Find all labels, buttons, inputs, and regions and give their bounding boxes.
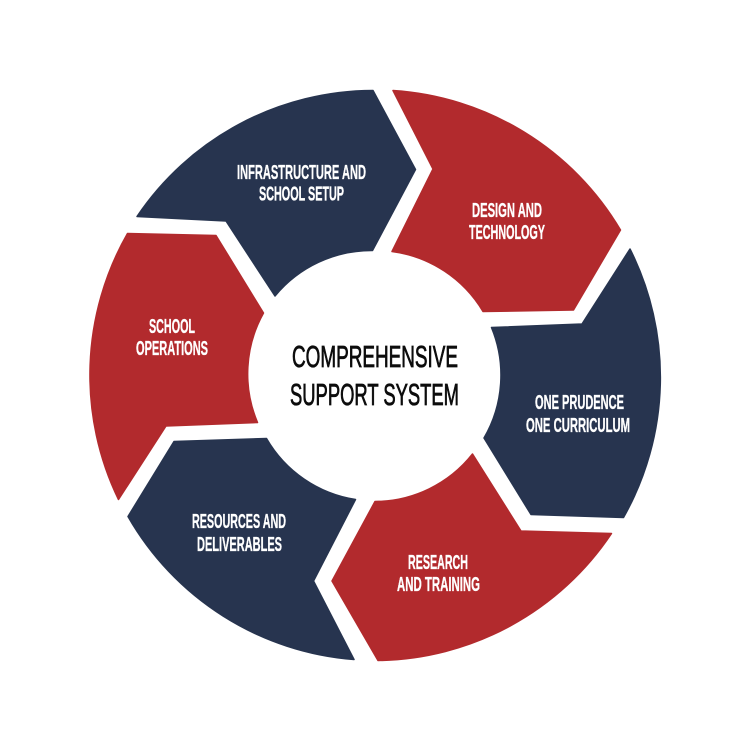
label: one prudence one curriculum: ONE CURRICULUM [526, 415, 630, 437]
label: research and training [397, 552, 480, 596]
label: research and training: AND TRAINING [397, 574, 480, 596]
panel: research and training [332, 454, 612, 660]
panel: resources and deliverables [128, 438, 356, 660]
center title: COMPREHENSIVE [292, 340, 458, 374]
label: design and technology: TECHNOLOGY [469, 222, 545, 244]
panel: design and technology [392, 90, 620, 312]
label: design and technology [469, 200, 545, 244]
label: infrastructure and school setup: INFRASTRUCTURE AND [237, 162, 366, 184]
panel: one prudence one curriculum [484, 249, 660, 518]
label: school operations [136, 316, 208, 360]
label: school operations: OPERATIONS [136, 338, 208, 360]
label: design and technology: DESIGN AND [472, 200, 542, 222]
label: research and training: RESEARCH [408, 552, 468, 574]
label: resources and deliverables: DELIVERABLES [197, 534, 282, 556]
label: infrastructure and school setup [237, 162, 366, 206]
panel: infrastructure and school setup [137, 90, 416, 296]
label: one prudence one curriculum: ONE PRUDENCE [535, 392, 624, 414]
center title [290, 340, 459, 412]
label: one prudence one curriculum [526, 392, 630, 437]
label: resources and deliverables: RESOURCES AND [192, 511, 286, 533]
label: resources and deliverables [192, 511, 286, 556]
panel: school operations [90, 234, 264, 500]
label: infrastructure and school setup: SCHOOL SETUP [259, 184, 344, 206]
center title: SUPPORT SYSTEM [290, 378, 459, 412]
label: school operations: SCHOOL [149, 316, 195, 338]
